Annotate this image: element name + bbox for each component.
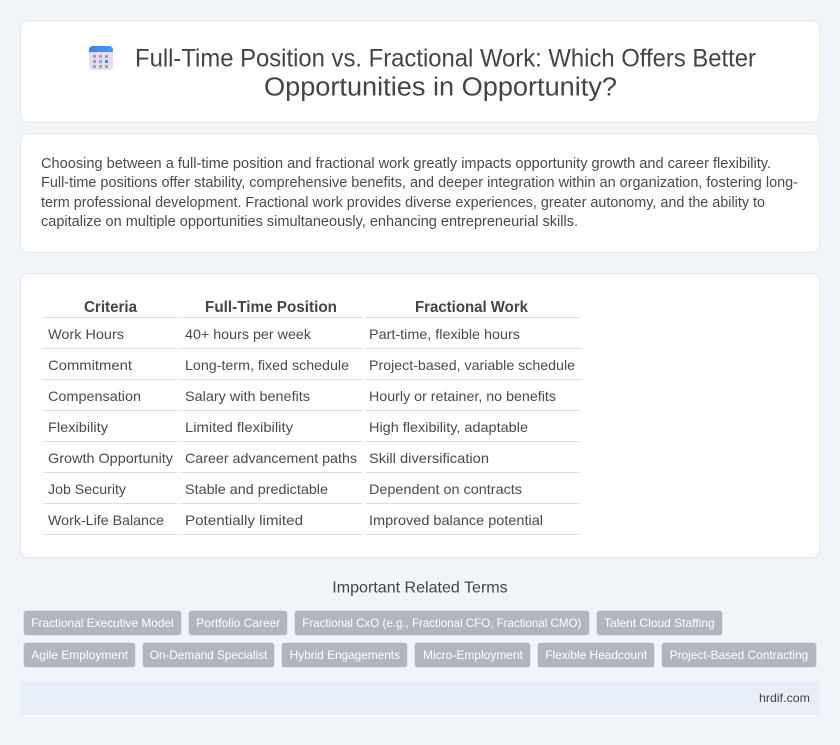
row: job security: Job Security <box>48 481 126 497</box>
row: work-life balance: Improved balance potential <box>369 512 543 528</box>
row: compensation: Compensation <box>48 388 141 404</box>
row: commitment: Long-term, fixed schedule <box>185 357 349 373</box>
row: flexibility: High flexibility, adaptable <box>369 419 528 435</box>
panel: comparison table <box>20 274 820 558</box>
panel: related term tags: Fractional Executive Model <box>31 616 174 630</box>
panel: introduction <box>20 134 820 252</box>
text block: introduction paragraph: capitalize on multiple opportunities simultaneously, enhancing entrepreneurial skills. <box>41 214 578 230</box>
footer source label: hrdif.com <box>759 691 810 705</box>
panel: related term tags: Hybrid Engagements <box>290 648 400 662</box>
heading: important related terms: Important Related Terms <box>332 580 508 596</box>
row: work hours: Part-time, flexible hours <box>369 326 520 342</box>
title: Opportunities in Opportunity? <box>264 74 617 102</box>
row: flexibility <box>48 419 528 435</box>
panel: related term tags: Project-Based Contracting <box>670 648 808 662</box>
panel: related term tags: Micro-Employment <box>423 648 524 662</box>
row: job security <box>48 481 522 497</box>
panel: title header <box>20 20 820 122</box>
table header: Criteria <box>84 299 137 316</box>
row: work-life balance: Potentially limited <box>185 512 303 528</box>
row: flexibility: Flexibility <box>48 419 108 435</box>
panel: related term tags: Fractional CxO (e.g., Fractional CFO, Fractional CMO) <box>302 616 581 630</box>
title: Full-Time Position vs. Fractional Work: Which Offers Better <box>135 45 756 73</box>
row: job security: Dependent on contracts <box>369 481 522 497</box>
panel: related term tags: Portfolio Career <box>196 616 280 630</box>
row: work-life balance <box>48 512 543 528</box>
row: growth opportunity: Skill diversification <box>369 450 489 466</box>
icon: calendar <box>89 46 113 70</box>
row: work-life balance: Work-Life Balance <box>48 512 164 528</box>
row: commitment: Commitment <box>48 357 132 373</box>
row: growth opportunity: Growth Opportunity <box>48 450 173 466</box>
panel: related term tags: On-Demand Specialist <box>150 648 268 662</box>
table header: Full-Time Position <box>205 299 337 316</box>
row: compensation: Hourly or retainer, no benefits <box>369 388 556 404</box>
footer bar <box>20 681 820 714</box>
panel: related term tags: Agile Employment <box>31 648 129 662</box>
panel: related term tags <box>24 610 816 668</box>
text block: introduction paragraph <box>41 156 798 230</box>
row: work hours: Work Hours <box>48 326 124 342</box>
row: compensation: Salary with benefits <box>185 388 310 404</box>
title <box>135 45 756 102</box>
row: growth opportunity <box>48 450 489 466</box>
table header <box>84 299 528 316</box>
row: growth opportunity: Career advancement paths <box>185 450 357 466</box>
text block: introduction paragraph: Full-time positions offer stability, comprehensive benefits, and deeper integration within an organization, fostering long- <box>41 175 798 191</box>
row: compensation <box>48 388 556 404</box>
row: work hours: 40+ hours per week <box>185 326 312 342</box>
row: commitment <box>48 357 575 373</box>
panel: related term tags: Flexible Headcount <box>545 648 648 662</box>
table header: Fractional Work <box>415 299 528 316</box>
row: job security: Stable and predictable <box>185 481 328 497</box>
panel: related term tags: Talent Cloud Staffing <box>604 616 715 630</box>
text block: introduction paragraph: Choosing between a full-time position and fractional work greatly impacts opportunity growth and career flexibility. <box>41 156 771 172</box>
row: work hours <box>48 326 520 342</box>
text block: introduction paragraph: term professional development. Fractional work provides diverse experiences, greater autonomy, and the ability to <box>41 195 765 211</box>
row: commitment: Project-based, variable schedule <box>369 357 575 373</box>
row: flexibility: Limited flexibility <box>185 419 293 435</box>
